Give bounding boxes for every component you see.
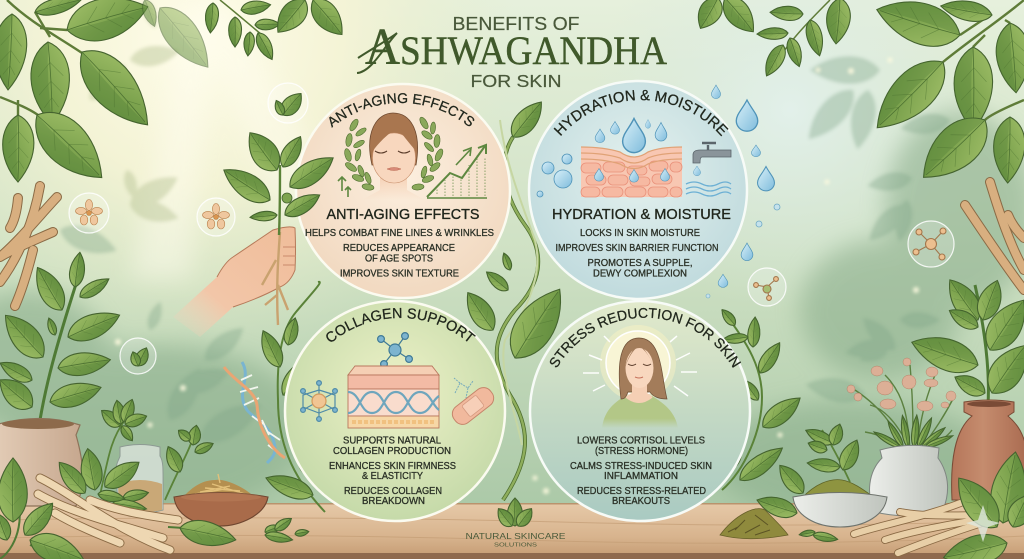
foreground leaves bottom-right bbox=[940, 449, 1024, 559]
benefit list: LOWERS CORTISOL LEVELS bbox=[577, 436, 705, 446]
curved heading: STRESS REDUCTION FOR SKIN bbox=[550, 308, 741, 368]
icon: skin block with collagen bbox=[348, 366, 439, 428]
white pot with flowers bbox=[847, 358, 956, 516]
benefit list: BREAKDOWN bbox=[362, 496, 425, 507]
small herb sprigs bbox=[97, 397, 215, 500]
roots on the table, right bbox=[854, 500, 985, 553]
benefit list: REDUCES COLLAGEN bbox=[344, 486, 442, 497]
panel: collagen support bbox=[284, 300, 506, 522]
benefit list: CALMS STRESS-INDUCED SKIN bbox=[570, 461, 712, 472]
benefit list: & ELASTICITY bbox=[362, 471, 423, 482]
foliage: top sprig bbox=[204, 0, 351, 62]
icon: leaf in bubble bbox=[128, 345, 152, 368]
icon: flower right bbox=[202, 204, 230, 229]
logo: natural skincare solutions: SOLUTIONS bbox=[494, 542, 537, 548]
subheading: ANTI-AGING EFFECTS bbox=[326, 206, 480, 223]
benefit list bbox=[305, 228, 494, 280]
leaves in front of jar bbox=[52, 447, 150, 514]
green sprig behind white bowl bbox=[754, 422, 864, 522]
floating bubbles bbox=[69, 83, 954, 374]
benefit list: SUPPORTS NATURAL bbox=[343, 436, 441, 446]
benefit list: IMPROVES SKIN BARRIER FUNCTION bbox=[556, 243, 718, 254]
benefit list bbox=[556, 228, 718, 280]
foliage: top-left branch bbox=[0, 0, 221, 193]
roots: upper left and right bbox=[0, 182, 1024, 306]
right potted plant bbox=[907, 273, 1024, 500]
title: FOR SKIN bbox=[470, 71, 562, 91]
benefit list: PROMOTES A SUPPLE, bbox=[588, 258, 692, 269]
icon: face with laurel bbox=[343, 113, 444, 200]
benefit list: HELPS COMBAT FINE LINES & WRINKLES bbox=[305, 228, 494, 239]
benefit list bbox=[570, 436, 712, 507]
icon: hexagonal molecule bbox=[301, 381, 337, 421]
benefit list: REDUCES APPEARANCE bbox=[343, 243, 455, 254]
icon: small molecule bbox=[454, 378, 473, 398]
logo: natural skincare solutions bbox=[466, 498, 566, 548]
title bbox=[357, 13, 667, 91]
benefit list: REDUCES STRESS-RELATED bbox=[577, 486, 706, 497]
DNA helix bbox=[224, 362, 285, 463]
benefit list: DEWY COMPLEXION bbox=[593, 268, 687, 280]
title: ASHWAGANDHA bbox=[365, 19, 667, 76]
collagen side vine bbox=[255, 282, 326, 512]
white bowl with herbs bbox=[793, 480, 887, 527]
icon: rising chart bbox=[338, 145, 487, 198]
icon: bandage bbox=[449, 384, 497, 428]
benefit list: OF AGE SPOTS bbox=[365, 254, 433, 264]
central vine bbox=[459, 95, 575, 500]
panel: anti-aging effects bbox=[294, 82, 512, 300]
outer water drops bbox=[706, 85, 780, 298]
foliage: small top-right sprig bbox=[691, 0, 852, 79]
panel: stress reduction for skin bbox=[528, 300, 752, 522]
hand holding ashwagandha plant bbox=[173, 125, 339, 337]
panel: hydration and moisture bbox=[528, 80, 748, 300]
roots on the table, left bbox=[38, 478, 178, 550]
foliage: top-right branch bbox=[863, 0, 1024, 193]
curved heading: ANTI-AGING EFFECTS bbox=[329, 93, 474, 128]
benefit list: (STRESS HORMONE) bbox=[595, 446, 688, 457]
benefit list: INFLAMMATION bbox=[604, 471, 678, 482]
benefit list: LOCKS IN SKIN MOISTURE bbox=[580, 228, 700, 239]
icon: molecule top bbox=[378, 333, 412, 367]
benefit list: COLLAGEN PRODUCTION bbox=[333, 446, 451, 457]
subheading: HYDRATION & MOISTURE bbox=[552, 206, 731, 223]
curved heading: HYDRATION & MOISTURE bbox=[554, 90, 728, 136]
icon: water drops and skin cells bbox=[537, 118, 701, 197]
benefit list: IMPROVES SKIN TEXTURE bbox=[340, 268, 459, 280]
icon: leaf in upper bubble bbox=[272, 88, 307, 120]
icon: flower left bbox=[76, 200, 102, 225]
decorative sparkles bbox=[115, 58, 919, 494]
left potted plant bbox=[0, 251, 124, 506]
benefit list: ENHANCES SKIN FIRMNESS bbox=[329, 461, 456, 472]
title: BENEFITS OF bbox=[452, 13, 580, 34]
benefit list: BREAKOUTS bbox=[612, 496, 670, 507]
curved heading: COLLAGEN SUPPORT bbox=[326, 308, 476, 342]
wooden bowl with shredded root bbox=[174, 474, 268, 526]
foreground leaves bottom-left bbox=[0, 458, 309, 559]
glass jar bbox=[116, 444, 163, 513]
icon: faucet and waves bbox=[686, 143, 731, 196]
loose dried herbs pile bbox=[720, 509, 838, 543]
right side vine bbox=[718, 307, 806, 490]
icon: molecules in bubbles bbox=[754, 228, 946, 300]
wooden table bbox=[0, 503, 1024, 559]
benefit list bbox=[329, 436, 456, 507]
logo: natural skincare solutions: NATURAL SKINCARE bbox=[466, 532, 566, 541]
icon: calm woman with halo bbox=[583, 325, 697, 428]
